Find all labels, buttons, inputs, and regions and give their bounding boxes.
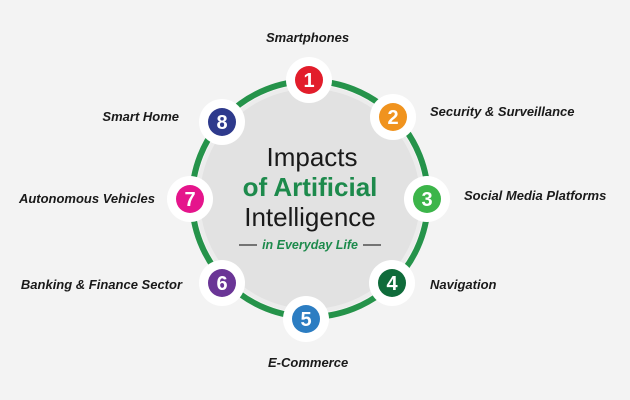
badge 3 [404, 176, 450, 222]
badge 8: 8 [216, 112, 228, 134]
badge 6 [199, 260, 245, 306]
label: Smart Home: Smart Home [102, 109, 179, 124]
badge 4: 4 [386, 273, 398, 295]
label: Navigation: Navigation [430, 277, 496, 292]
title: Impacts [266, 142, 358, 172]
title: Intelligence [244, 202, 376, 232]
badge 7: 7 [184, 189, 196, 211]
label: Autonomous Vehicles: Autonomous Vehicles [19, 191, 155, 206]
inner circle [198, 87, 422, 311]
badge 5: 5 [300, 309, 312, 331]
badge 1 [286, 57, 332, 103]
badge 3: 3 [421, 189, 433, 211]
badge 2: 2 [387, 107, 399, 129]
label: Security & Surveillance: Security & Surveillance [430, 104, 575, 119]
label: Banking & Finance Sector: Banking & Finance Sector [21, 277, 182, 292]
badge 7 [167, 176, 213, 222]
label: Smartphones: Smartphones [266, 30, 349, 45]
title [239, 142, 381, 252]
label: Social Media Platforms: Social Media Platforms [464, 188, 606, 203]
title: in Everyday Life [262, 238, 358, 252]
label: E-Commerce: E-Commerce [268, 355, 348, 370]
green ring [192, 81, 428, 317]
badge 5 [283, 296, 329, 342]
badge 6: 6 [216, 273, 228, 295]
badge 8 [199, 99, 245, 145]
badge 4 [369, 260, 415, 306]
badge 1: 1 [303, 70, 315, 92]
badge 2 [370, 94, 416, 140]
title: of Artificial [243, 172, 377, 202]
